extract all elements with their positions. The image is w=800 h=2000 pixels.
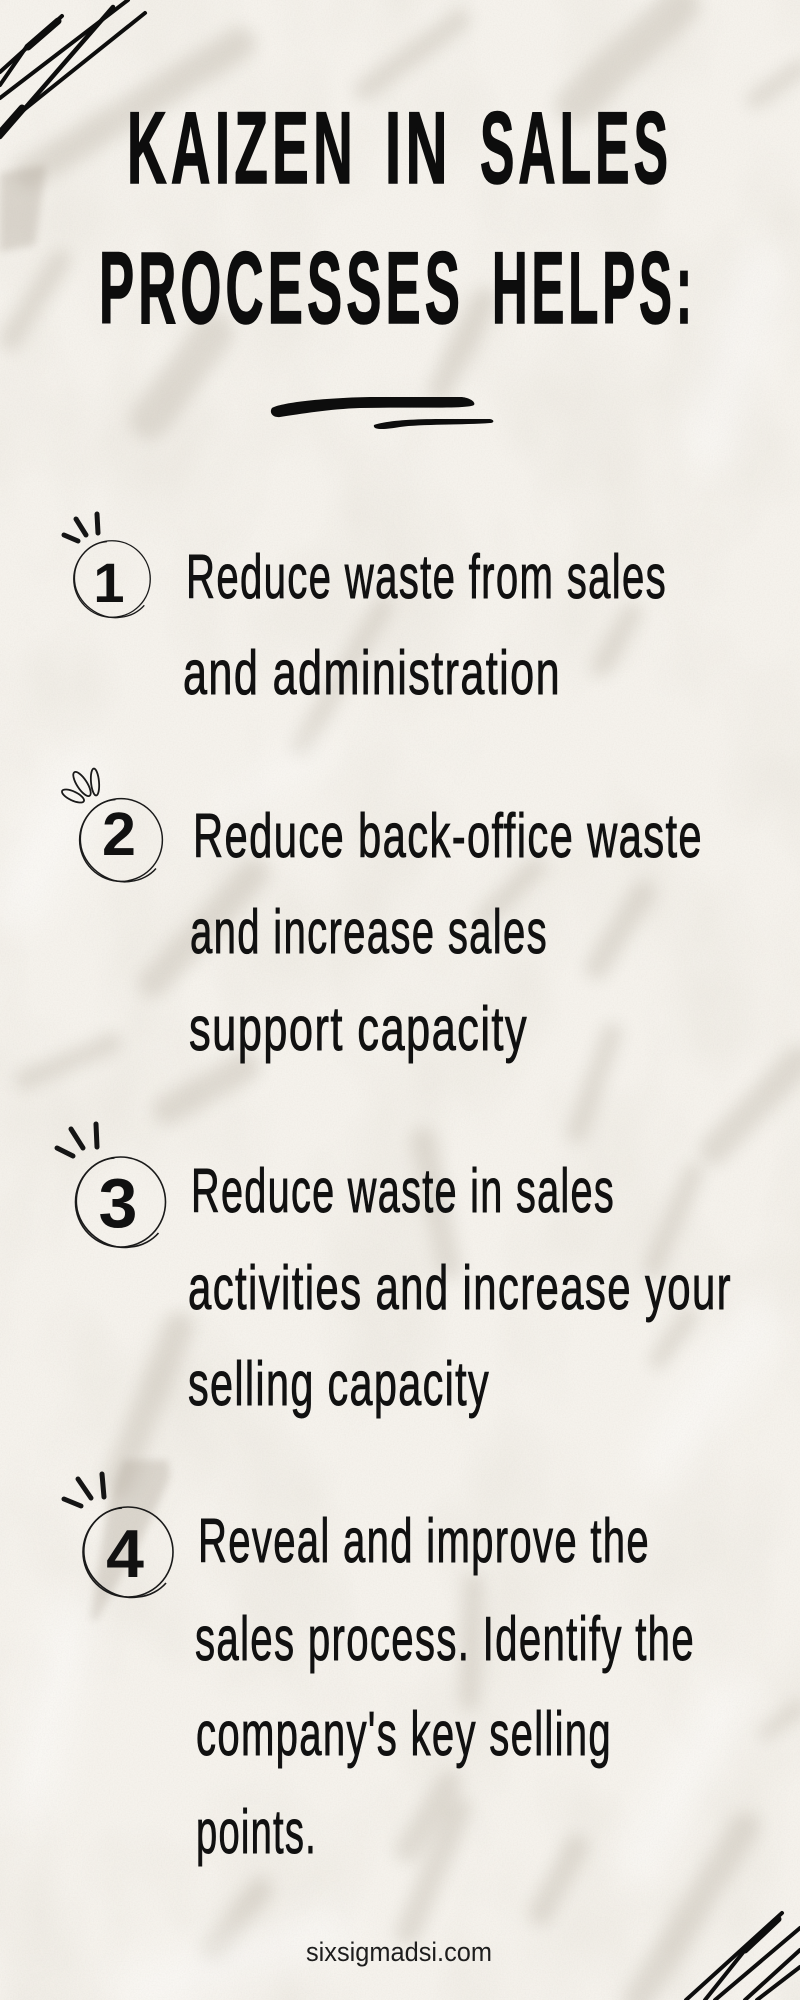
text: item 2: support capacity xyxy=(189,995,528,1064)
text: item 2 xyxy=(189,802,703,1064)
title xyxy=(99,91,696,345)
text: item 3 xyxy=(188,1157,732,1419)
icon: number circle 3 xyxy=(76,1157,166,1247)
item 4 xyxy=(64,1474,695,1867)
footer website: sixsigmadsi.com xyxy=(306,1937,492,1967)
text: item 4: points. xyxy=(196,1798,317,1867)
item 3 xyxy=(57,1124,732,1419)
icon: number circle 1 xyxy=(74,541,150,618)
icon: number circle 4 xyxy=(83,1507,173,1597)
title word: KAIZEN: KAIZEN xyxy=(127,91,357,205)
number 4: 4 xyxy=(106,1516,144,1592)
icon: sparkle rays 1 xyxy=(64,514,98,541)
icon: petals xyxy=(60,768,100,805)
item 1 xyxy=(64,514,667,708)
icon: number circle 2 xyxy=(80,799,162,882)
title word: PROCESSES: PROCESSES xyxy=(99,231,464,345)
icon: sparkle rays 4 xyxy=(64,1474,104,1506)
title word: IN: IN xyxy=(385,91,452,205)
text: item 1 xyxy=(183,543,667,708)
icon: sparkle rays 3 xyxy=(57,1124,97,1156)
number 3: 3 xyxy=(99,1164,137,1242)
text: item 3: selling capacity xyxy=(188,1350,490,1419)
number 2: 2 xyxy=(102,800,136,868)
text: item 2: and increase sales xyxy=(190,898,548,967)
decorative scribble: bottom-right corner xyxy=(686,1913,800,2000)
text: item 4 xyxy=(195,1507,695,1867)
text: item 1: and administration xyxy=(183,639,561,708)
decorative scribble: top-left corner xyxy=(0,0,145,137)
item 2 xyxy=(60,768,703,1064)
number 1: 1 xyxy=(93,551,125,614)
brush underline xyxy=(271,397,493,429)
